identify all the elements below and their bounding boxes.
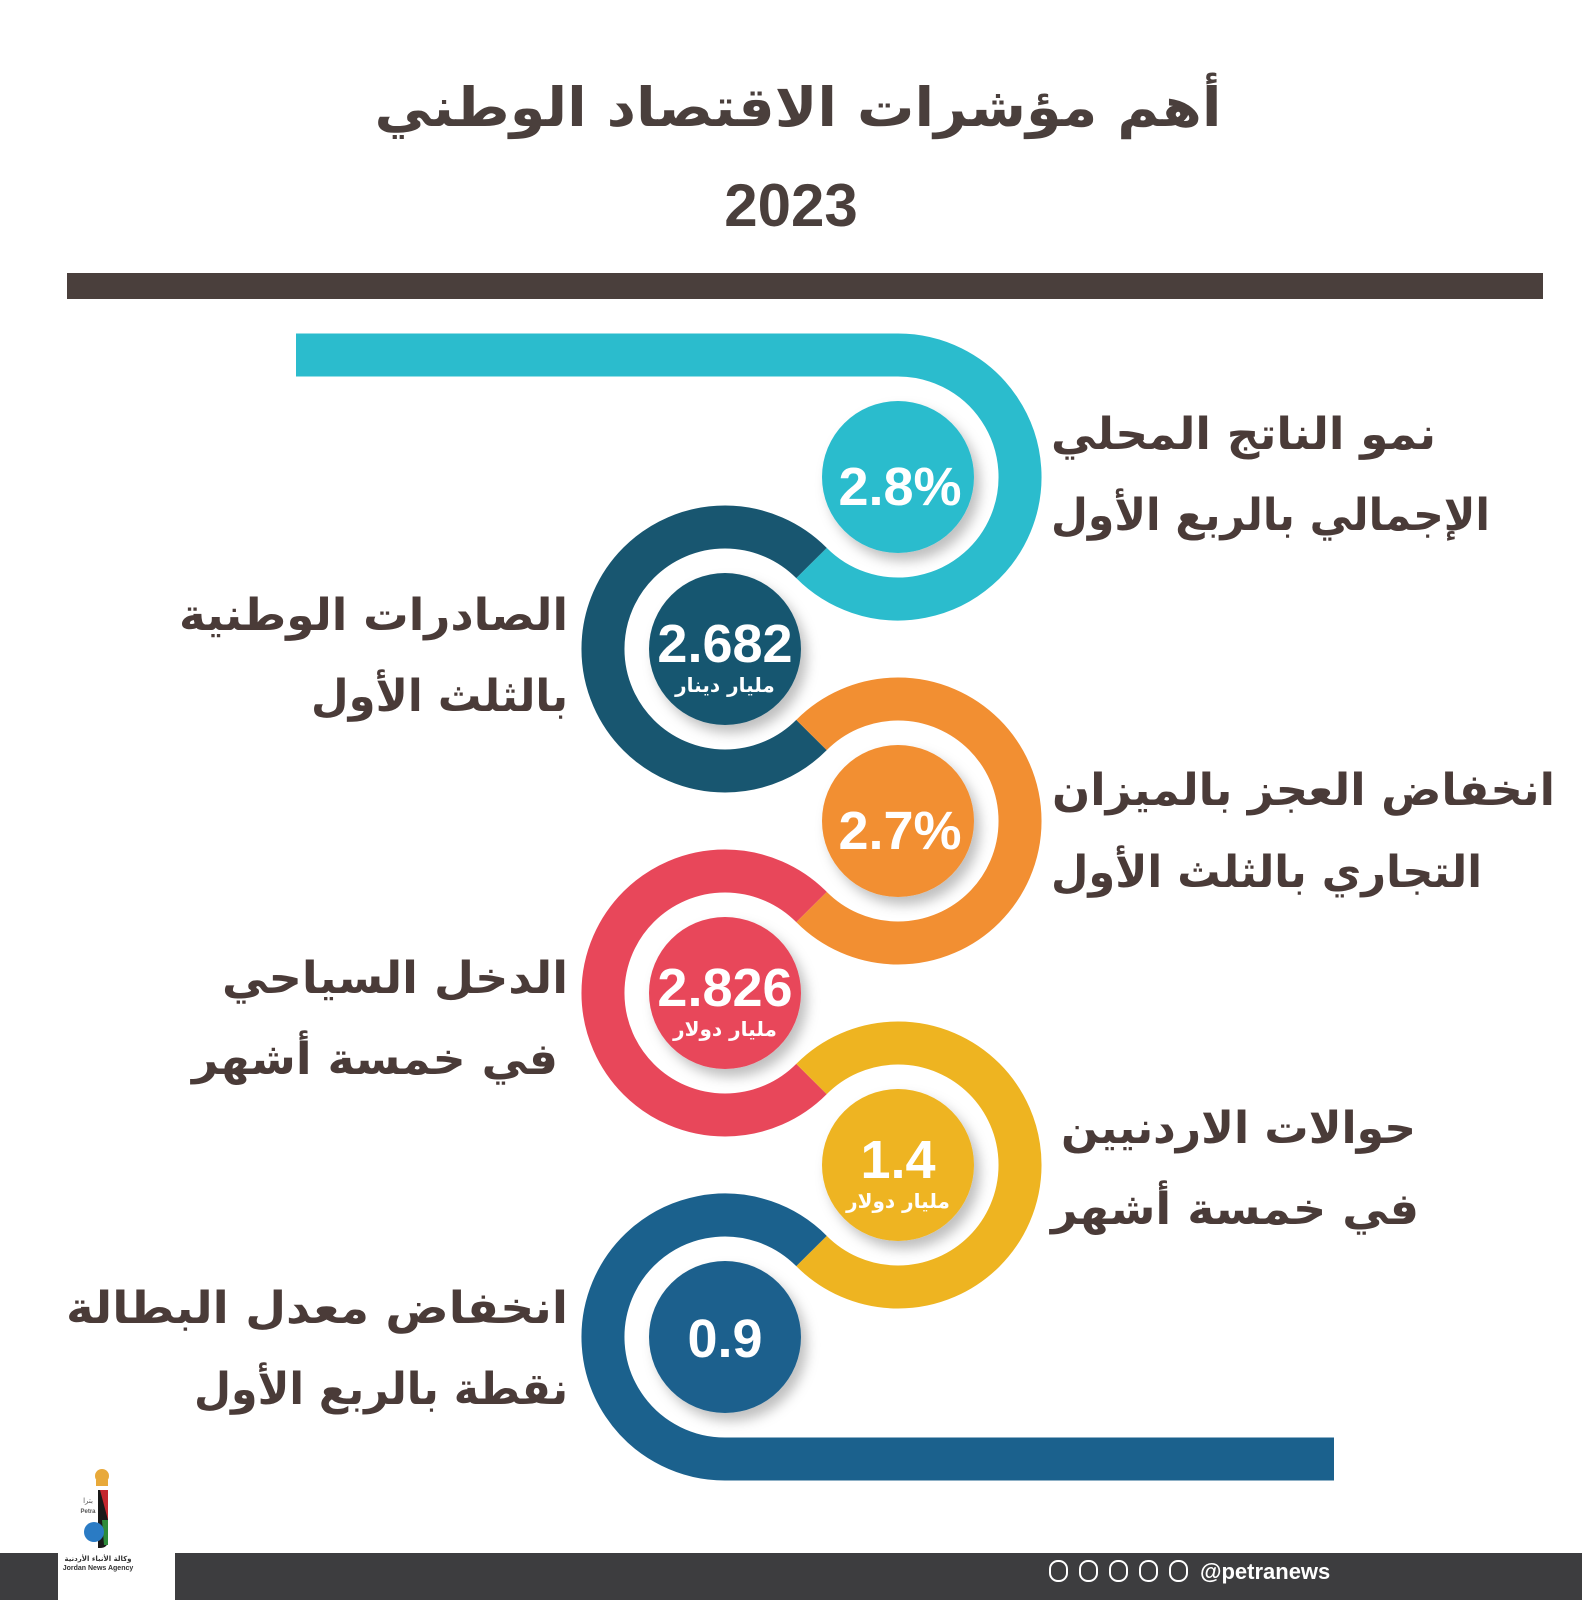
circle: remittances 1.4: مليار دولار (845, 1189, 950, 1213)
label: trade deficit: انخفاض العجز بالميزان (1052, 765, 1555, 816)
social handle: @petranews (1200, 1559, 1330, 1584)
title: 2023 (724, 172, 858, 239)
ring path: cyan (296, 355, 1020, 599)
logo: Petra news agency: Petra (80, 1509, 96, 1515)
label: GDP growth: نمو الناتج المحلي (1051, 409, 1436, 460)
label: GDP growth: الإجمالي بالربع الأول (1051, 488, 1490, 541)
logo: Petra news agency: Jordan News Agency (63, 1565, 133, 1572)
label: trade deficit (1051, 765, 1555, 898)
circle: remittances 1.4: 1.4 (860, 1130, 936, 1190)
circle: tourism 2.826: 2.826 (657, 958, 793, 1018)
footer bar (0, 1553, 1582, 1600)
label: trade deficit: التجاري بالثلث الأول (1051, 845, 1482, 898)
circle: remittances 1.4 (822, 1089, 974, 1241)
circle: GDP 2.8%: 2.8% (838, 457, 962, 517)
logo: Petra news agency: وكالة الأنباء الأردنية (64, 1554, 132, 1563)
label: unemployment: انخفاض معدل البطالة (66, 1283, 568, 1334)
label: unemployment (66, 1283, 568, 1415)
circle: exports 2.682 (649, 573, 801, 725)
label: national exports: الصادرات الوطنية (179, 590, 568, 641)
circle: tourism 2.826 (649, 917, 801, 1069)
ring path: red (603, 871, 812, 1115)
title (374, 72, 1222, 239)
circle: trade deficit 2.7% (822, 745, 974, 897)
label: tourism income: في خمسة أشهر (190, 1030, 558, 1085)
label: GDP growth (1051, 409, 1490, 541)
label: remittances: حوالات الاردنيين (1061, 1103, 1416, 1154)
circle: trade deficit 2.7%: 2.7% (838, 801, 962, 861)
ring path: yellow (812, 1043, 1020, 1287)
circle: unemployment 0.9: 0.9 (687, 1309, 763, 1369)
circle: unemployment 0.9 (649, 1261, 801, 1413)
circle: GDP 2.8% (822, 401, 974, 553)
label: unemployment: نقطة بالربع الأول (194, 1362, 568, 1415)
label: tourism income (190, 953, 568, 1085)
title: أهم مؤشرات الاقتصاد الوطني (374, 72, 1222, 139)
label: remittances (1049, 1103, 1419, 1235)
logo: Petra news agency: بترا (83, 1497, 93, 1505)
header divider bar (67, 273, 1543, 299)
circle: tourism 2.826: مليار دولار (672, 1017, 777, 1041)
ring path: dark teal (603, 527, 812, 771)
label: tourism income: الدخل السياحي (222, 953, 568, 1004)
circle: exports 2.682: مليار دينار (674, 673, 775, 697)
label: national exports (179, 590, 568, 722)
ring path: blue (603, 1215, 1334, 1459)
logo: Petra news agency (58, 1469, 175, 1600)
circle: exports 2.682: 2.682 (657, 614, 793, 674)
label: remittances: في خمسة أشهر (1049, 1180, 1419, 1235)
label: national exports: بالثلث الأول (311, 669, 568, 722)
ring path: orange (812, 699, 1020, 943)
social icons (1050, 1561, 1187, 1581)
